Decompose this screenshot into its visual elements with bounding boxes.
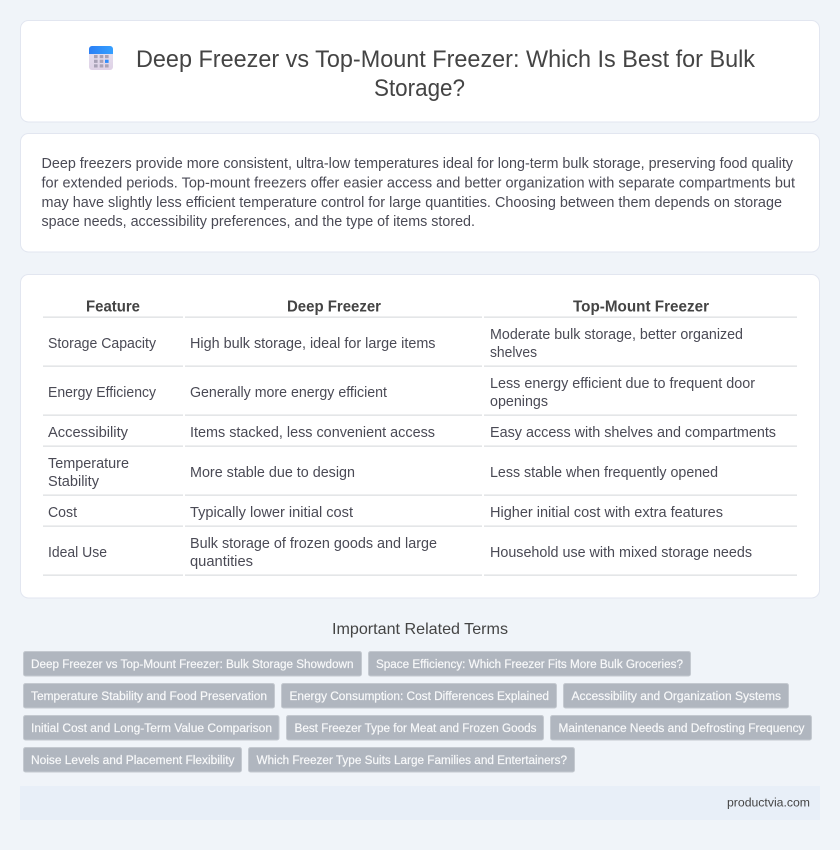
tag: Initial Cost and Long-Term Value Comparison (31, 721, 272, 735)
tag: Deep Freezer vs Top-Mount Freezer: Bulk Storage Showdown (31, 657, 354, 671)
table header row: Top-Mount Freezer (573, 298, 709, 316)
row: temperature stability: More stable due to design (190, 465, 355, 481)
row: ideal use: Bulk storage of frozen goods and large (190, 536, 437, 552)
row: temperature stability: Less stable when frequently opened (490, 465, 718, 481)
tag: Maintenance Needs and Defrosting Frequency (558, 721, 805, 735)
row: storage capacity: Moderate bulk storage, better organized (490, 327, 743, 343)
tag (24, 652, 362, 676)
row: ideal use: Household use with mixed storage needs (490, 545, 752, 561)
row: temperature stability: Temperature (48, 456, 129, 472)
tag: Best Freezer Type for Meat and Frozen Goods (294, 721, 536, 735)
row: energy efficiency: Energy Efficiency (48, 385, 157, 401)
panel: comparison table (20, 274, 820, 598)
tag (368, 652, 690, 676)
row: storage capacity: shelves (490, 345, 537, 361)
text block: summary: for extended periods. Top-mount freezers offer easier access and better organization with separate compartments but (42, 176, 795, 192)
title: Deep Freezer vs Top-Mount Freezer: Which Is Best for Bulk (136, 46, 756, 73)
row: energy efficiency: openings (490, 394, 548, 410)
text block: summary: may have slightly less efficient temperature control for large quantities. Choosing between them depends on storage (42, 195, 782, 211)
tag (24, 748, 242, 772)
tag (24, 716, 279, 740)
row: ideal use (48, 536, 752, 570)
row: accessibility: Items stacked, less convenient access (190, 425, 435, 441)
tag: Noise Levels and Placement Flexibility (31, 753, 235, 767)
row: accessibility: Accessibility (48, 425, 129, 441)
title (136, 46, 756, 102)
footer bar (20, 786, 820, 820)
row: temperature stability (48, 456, 718, 490)
tag: Temperature Stability and Food Preservation (31, 689, 267, 703)
row: cost: Typically lower initial cost (190, 505, 353, 521)
row: accessibility (48, 425, 776, 441)
row: cost: Higher initial cost with extra features (490, 505, 723, 521)
row: energy efficiency: Less energy efficient due to frequent door (490, 376, 755, 392)
text block: summary: space needs, accessibility preferences, and the type of items stored. (42, 214, 475, 230)
tag (550, 716, 812, 740)
tag: Accessibility and Organization Systems (572, 689, 781, 703)
table header row: Deep Freezer (287, 298, 381, 316)
text block: summary (42, 156, 795, 230)
row: energy efficiency: Generally more energy efficient (190, 385, 387, 401)
text block: summary: Deep freezers provide more consistent, ultra-low temperatures ideal for long-term bulk storage, preserving food quality (42, 156, 794, 172)
panel: title header (20, 20, 820, 122)
tag: Which Freezer Type Suits Large Families and Entertainers? (256, 753, 567, 767)
footer source text: productvia.com (727, 796, 810, 810)
title: Storage? (374, 75, 465, 102)
row: storage capacity (48, 327, 743, 361)
tag (282, 684, 556, 708)
row: storage capacity: Storage Capacity (48, 336, 157, 352)
row: ideal use: Ideal Use (48, 545, 107, 561)
tag (286, 716, 544, 740)
table header row: Feature (86, 298, 140, 316)
panel: intro paragraph (20, 134, 820, 252)
row: cost: Cost (48, 505, 77, 521)
row: accessibility: Easy access with shelves and compartments (490, 425, 776, 441)
row: storage capacity: High bulk storage, ideal for large items (190, 336, 436, 352)
row: ideal use: quantities (190, 554, 253, 570)
heading: related terms: Important Related Terms (332, 621, 508, 638)
panel: related term tags (24, 652, 812, 772)
row: temperature stability: Stability (48, 474, 100, 490)
table header row (86, 298, 709, 316)
row: cost (48, 505, 723, 521)
tag: Space Efficiency: Which Freezer Fits More Bulk Groceries? (376, 657, 683, 671)
tag (564, 684, 788, 708)
tag (24, 684, 274, 708)
row: energy efficiency (48, 376, 755, 410)
tag: Energy Consumption: Cost Differences Explained (290, 689, 549, 703)
icon: calendar grid (89, 46, 113, 70)
tag (248, 748, 574, 772)
